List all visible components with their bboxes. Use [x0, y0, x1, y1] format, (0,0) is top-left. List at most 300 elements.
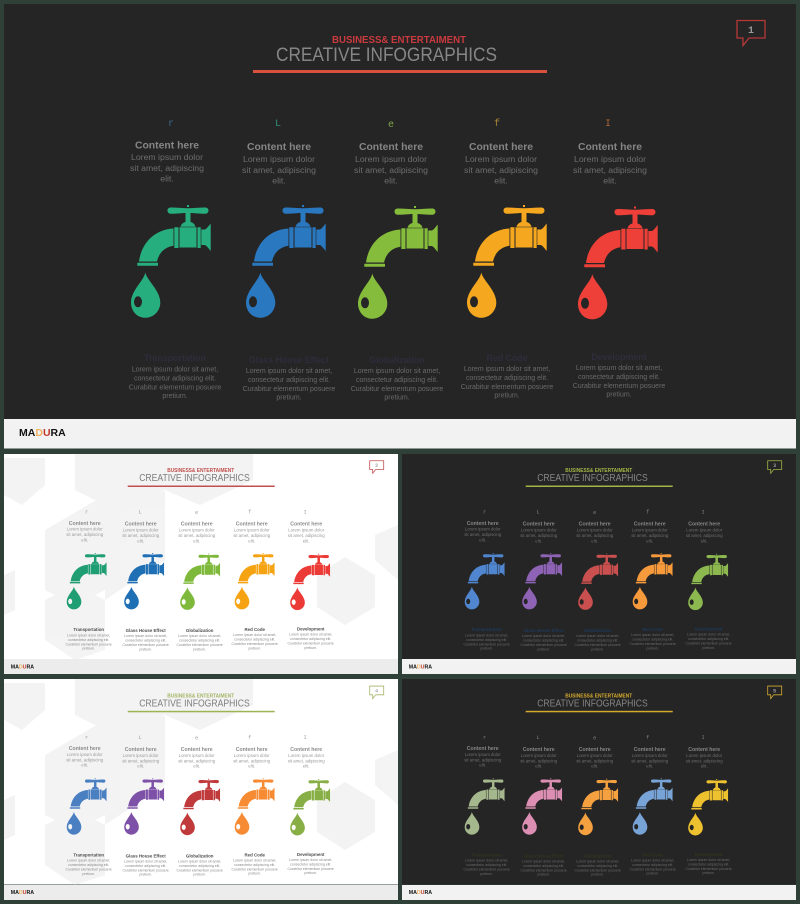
- slide 3 column 3: Lorem ipsum dolor sit amet,: [576, 634, 619, 638]
- slide 5 column 5: Lorem ipsum dolor sit amet,: [687, 858, 730, 862]
- slide 5 kicker: BUSINESS& ENTERTAIMENT: [565, 693, 633, 699]
- slide 4 column 1: r: [85, 735, 88, 741]
- slide 1 title: CREATIVE INFOGRAPHICS: [276, 44, 497, 66]
- slide 3 column 3: Lorem ipsum dolor: [577, 528, 613, 532]
- slide 2 title: CREATIVE INFOGRAPHICS: [139, 473, 250, 484]
- slide 4 kicker: BUSINESS& ENTERTAIMENT: [167, 693, 235, 699]
- slide 5 column 1: elit.: [479, 763, 486, 768]
- slide 2 column 4: Curabitur elementum posuere: [232, 642, 278, 646]
- slide 3 column 2: Glass House Effect: [524, 628, 564, 633]
- slide 5 column 1: Lorem ipsum dolor: [465, 752, 501, 757]
- slide 4 column 1: elit.: [81, 763, 88, 768]
- slide 5 column 2: Curabitur elementum posuere: [521, 868, 567, 872]
- slide 5 column 3: sit amet, adipiscing: [576, 758, 614, 763]
- slide 5 column 3: pretium.: [591, 873, 604, 877]
- slide 4 column 4: Curabitur elementum posuere: [232, 867, 278, 871]
- slide 1 column 2: sit amet, adipiscing: [242, 165, 316, 175]
- slide 1 page badge: 1: [748, 26, 754, 37]
- slide 2 column 4: [232, 510, 278, 650]
- slide 1 column 2: Curabitur elementum posuere: [243, 386, 335, 393]
- slide 2 column 5: [288, 510, 334, 650]
- slide 3 column 4: pretium.: [646, 646, 659, 650]
- slide 5 column 5: Lorem ipsum dolor: [686, 753, 723, 758]
- slide 3 column 2: Curabitur elementum posuere: [521, 643, 567, 647]
- slide 3 column 5: Development: [695, 626, 723, 632]
- slide 1 column 4: [461, 118, 553, 400]
- slide 3 column 2: pretium.: [537, 647, 550, 651]
- slide 2 column 1: Lorem ipsum dolor: [67, 526, 103, 532]
- slide 5 content: [409, 686, 782, 896]
- slide 5 page badge: 5: [773, 688, 776, 694]
- slide 4 column 2: [122, 735, 169, 877]
- slide 2 column 2: Content here: [125, 522, 157, 528]
- slide 5 column 3: e: [593, 735, 596, 741]
- slide 1 column 5: Content here: [578, 142, 642, 153]
- slide 2 column 5: Lorem ipsum dolor: [288, 528, 325, 532]
- slide 1 column 5: elit.: [603, 176, 617, 186]
- slide 2 column 2: Glass House Effect: [126, 628, 166, 633]
- slide 2 column 2: consectetur adipiscing elit.: [125, 638, 166, 642]
- slide 5 column 2: elit.: [535, 764, 542, 769]
- slide 1 column 4: elit.: [494, 176, 508, 186]
- slide 3 column 2: Lorem ipsum dolor sit amet,: [522, 634, 565, 638]
- slide 5 column 1: r: [483, 735, 486, 741]
- slide 4 content: [11, 686, 384, 896]
- slide 1 column 4: f: [494, 118, 500, 130]
- slide 4 column 1: Curabitur elementum posuere: [66, 868, 112, 872]
- slide 2 column 1: Curabitur elementum posuere: [66, 642, 112, 646]
- slide 3 column 1: r: [483, 510, 486, 516]
- slide 3 column 5: elit.: [701, 538, 708, 543]
- slide 1 column 5: pretium.: [606, 392, 632, 398]
- slide 4 page badge: [370, 686, 384, 699]
- slide 3 page badge: [768, 461, 782, 473]
- slide 1 column 3: consectetur adipiscing elit.: [356, 377, 438, 384]
- slide 4 column 2: Lorem ipsum dolor sit amet,: [124, 859, 167, 863]
- slide 4 column 5: elit.: [303, 764, 310, 769]
- slide 1 column 4: pretium.: [494, 392, 520, 400]
- slide 3 column 4: [630, 510, 676, 650]
- slide 5 column 3: Content here: [579, 747, 611, 753]
- slide 4 column 2: L: [139, 735, 142, 741]
- slide 3 column 3: Content here: [579, 522, 611, 528]
- slide 3 column 5: pretium.: [702, 646, 715, 650]
- slide 2 column 4: Content here: [236, 522, 268, 528]
- slide 1 column 3: e: [388, 120, 394, 131]
- slide 4 column 1: sit amet, adipiscing: [66, 757, 104, 762]
- slide 4 column 3: pretium.: [193, 873, 206, 877]
- slide 5 column 3: Curabitur elementum posuere: [575, 868, 621, 872]
- slide 1 column 5: [573, 119, 665, 398]
- slide 5 column 5: pretium.: [702, 871, 715, 875]
- slide 4 column 5: Lorem ipsum dolor sit amet,: [289, 858, 332, 862]
- slide 4 column 1: [66, 735, 112, 876]
- slide 5 column 2: consectetur adipiscing elit.: [523, 864, 564, 868]
- slide 5 column 5: Development: [695, 852, 723, 857]
- slide 5 title rule: [526, 711, 673, 712]
- slide 1 column 1: Lorem ipsum dolor sit amet,: [132, 366, 218, 374]
- slide 1 column 4: Lorem ipsum dolor: [465, 154, 537, 164]
- slide 2 column 1: pretium.: [82, 646, 95, 650]
- slide 5 column 3: elit.: [591, 764, 598, 769]
- slide 3 column 5: Lorem ipsum dolor: [686, 528, 723, 532]
- slide 5 column 4: f: [646, 735, 649, 741]
- slide 4 column 4: pretium.: [248, 872, 261, 876]
- slide 4 column 3: [177, 735, 223, 877]
- slide 4 column 4: Red Code: [244, 852, 265, 857]
- slide 4: small light: [4, 679, 398, 900]
- slide 4 column 1: consectetur adipiscing elit.: [68, 863, 109, 867]
- slide 4 column 5: pretium.: [304, 871, 317, 875]
- slide 1 column 1: consectetur adipiscing elit.: [134, 376, 216, 382]
- slide 5 column 4: elit.: [646, 764, 653, 769]
- slide 3: small dark: [402, 454, 796, 674]
- slide 5 column 3: consectetur adipiscing elit.: [577, 864, 618, 868]
- slide 4 column 5: [288, 735, 334, 875]
- slide 5 column 4: Lorem ipsum dolor: [632, 753, 668, 758]
- slide 1 logo: MADURA: [19, 427, 66, 439]
- slide 3 column 4: f: [646, 510, 649, 516]
- slide 5 column 2: pretium.: [537, 873, 550, 877]
- slide 2 kicker: BUSINESS& ENTERTAIMENT: [167, 468, 235, 474]
- slide 2 column 2: sit amet, adipiscing: [122, 533, 160, 538]
- slide 5 background: [402, 679, 796, 884]
- slide 3 background: [402, 454, 796, 659]
- slide 3 column 3: elit.: [591, 538, 598, 543]
- slide 1 column 1: elit.: [160, 174, 174, 184]
- slide 1 column 5: I: [605, 119, 611, 130]
- slide 3 logo: MADURA: [409, 664, 432, 670]
- slide 3 column 3: consectetur adipiscing elit.: [577, 638, 618, 642]
- slide 3 title rule: [526, 486, 673, 487]
- slide 5 column 3: Lorem ipsum dolor sit amet,: [576, 859, 619, 863]
- slide 2 column 2: Lorem ipsum dolor: [123, 528, 159, 532]
- slide 3 column 2: [520, 510, 567, 651]
- slide 4 column 3: e: [195, 735, 198, 741]
- slide 2 column 4: pretium.: [248, 646, 261, 650]
- slide 3 column 4: Curabitur elementum posuere: [630, 642, 676, 646]
- slide 3 column 3: pretium.: [591, 647, 604, 651]
- slide 1 column 3: Lorem ipsum dolor sit amet,: [354, 368, 440, 375]
- slide 5 column 3: [575, 735, 621, 877]
- slide 2: small light: [4, 454, 398, 674]
- slide 2 column 5: Development: [297, 626, 325, 632]
- slide 2 column 3: Lorem ipsum dolor: [179, 528, 215, 532]
- slide 2 column 1: elit.: [81, 537, 88, 542]
- slide 5 column 2: sit amet, adipiscing: [520, 758, 558, 763]
- slide 4 column 4: Lorem ipsum dolor sit amet,: [233, 858, 276, 862]
- slide 4 column 5: sit amet, adipiscing: [288, 758, 325, 763]
- slide 5 column 1: consectetur adipiscing elit.: [466, 863, 507, 867]
- slide 4 column 5: consectetur adipiscing elit.: [290, 862, 331, 866]
- slide 3 column 2: elit.: [535, 538, 542, 543]
- slide 3 column 3: Curabitur elementum posuere: [575, 643, 621, 647]
- slide 1 column 1: pretium.: [162, 393, 188, 400]
- slide 5 column 5: sit amet, adipiscing: [686, 758, 723, 763]
- slide 4 column 4: f: [248, 735, 251, 741]
- slide 3 column 2: consectetur adipiscing elit.: [523, 638, 564, 642]
- slide 3 column 1: elit.: [479, 537, 486, 542]
- slide 3 column 5: [686, 510, 732, 650]
- slide 5 logo: MADURA: [409, 890, 432, 896]
- slide 1 column 5: Lorem ipsum dolor sit amet,: [576, 365, 662, 372]
- slide 1 column 3: elit.: [384, 176, 398, 186]
- slide 3 column 4: consectetur adipiscing elit.: [632, 638, 673, 642]
- slide 5 column 4: sit amet, adipiscing: [631, 758, 669, 763]
- slide 3 column 5: I: [702, 510, 705, 516]
- slide 1 column 2: Glass House Effect: [249, 355, 329, 365]
- slide 5 column 2: Lorem ipsum dolor sit amet,: [522, 859, 565, 863]
- slide 2 column 3: Content here: [181, 522, 213, 528]
- slide 3 column 1: pretium.: [480, 646, 493, 650]
- slide 5 column 1: [464, 735, 510, 876]
- slide 3 column 1: [464, 510, 510, 650]
- slide 1 column 2: pretium.: [276, 394, 302, 402]
- slide 2 column 5: Curabitur elementum posuere: [288, 642, 334, 646]
- slide 1 column 1: Transportation: [144, 353, 206, 363]
- slide 5 column 2: Content here: [523, 747, 555, 753]
- slide 2 column 5: Content here: [290, 522, 322, 528]
- slide 4 column 2: Lorem ipsum dolor: [123, 753, 159, 758]
- slide 2 title rule: [128, 486, 275, 487]
- slide 2 column 5: sit amet, adipiscing: [288, 533, 325, 538]
- slide 2 column 5: Lorem ipsum dolor sit amet,: [289, 632, 332, 636]
- slide 3 column 1: Curabitur elementum posuere: [464, 642, 510, 646]
- slide 4 hexagon pattern: [4, 679, 398, 885]
- slide 1 column 3: sit amet, adipiscing: [354, 165, 428, 175]
- slide 2 column 5: I: [304, 510, 307, 516]
- slide 2 column 2: pretium.: [139, 647, 152, 651]
- slide 1 column 5: Curabitur elementum posuere: [573, 383, 665, 390]
- slide 4 column 3: Lorem ipsum dolor: [179, 753, 215, 758]
- slide 4 column 2: Content here: [125, 747, 157, 753]
- slide 2 column 3: [177, 510, 223, 651]
- slide 5 column 4: [630, 735, 676, 876]
- slide 2 footer bar: [4, 659, 398, 674]
- slide 4 footer bar: [4, 885, 398, 900]
- slide 3 column 2: Lorem ipsum dolor: [521, 528, 557, 532]
- slide 2 logo: MADURA: [11, 664, 34, 670]
- slide 5 column 2: Glass House Effect: [524, 853, 564, 858]
- slide 5 column 1: Content here: [467, 746, 499, 752]
- slide 5 title: CREATIVE INFOGRAPHICS: [537, 698, 648, 709]
- slide 2 content: [11, 461, 384, 670]
- slide 4 column 4: elit.: [248, 764, 255, 769]
- slide 5 column 4: Content here: [634, 747, 666, 753]
- slide 5 column 2: [520, 735, 567, 877]
- slide 3 column 5: Content here: [688, 522, 720, 528]
- slide 2 hexagon pattern: [4, 454, 398, 660]
- slide 1 column 3: Content here: [359, 142, 423, 153]
- slide 4 column 2: sit amet, adipiscing: [122, 758, 160, 763]
- slide 1 kicker: BUSINESS& ENTERTAIMENT: [332, 34, 467, 46]
- slide 2 column 3: elit.: [193, 538, 200, 543]
- slide 3 page badge: 3: [773, 463, 776, 469]
- slide 4 column 2: consectetur adipiscing elit.: [125, 864, 166, 868]
- slide 4 column 3: sit amet, adipiscing: [178, 758, 216, 763]
- slide 3 column 3: Globalization: [584, 628, 612, 633]
- slide 4 column 4: [232, 735, 278, 876]
- slide 2 column 1: sit amet, adipiscing: [66, 532, 104, 537]
- slide 1 column 5: consectetur adipiscing elit.: [578, 374, 660, 381]
- slide 1 column 1: Lorem ipsum dolor: [131, 152, 203, 162]
- slide 5 column 4: Lorem ipsum dolor sit amet,: [631, 858, 674, 862]
- slide 3 column 3: sit amet, adipiscing: [576, 533, 614, 538]
- slide 1 column 3: pretium.: [384, 394, 410, 402]
- slide 2 column 2: Curabitur elementum posuere: [123, 643, 169, 647]
- slide 3 column 2: sit amet, adipiscing: [520, 533, 558, 538]
- slide 3 column 3: e: [593, 510, 596, 516]
- slide 3 column 2: Content here: [523, 522, 555, 528]
- slide 4 column 3: Lorem ipsum dolor sit amet,: [178, 859, 221, 863]
- slide 2 column 1: Transportation: [73, 627, 104, 632]
- slide 2 column 5: pretium.: [304, 646, 317, 650]
- slide 1 column 2: Lorem ipsum dolor: [243, 154, 315, 164]
- slide 5 column 5: elit.: [701, 764, 708, 769]
- slide 5 column 2: Lorem ipsum dolor: [521, 753, 557, 758]
- slide 2 column 4: f: [248, 510, 251, 516]
- slide 5 column 3: Lorem ipsum dolor: [577, 753, 613, 758]
- slide 5 column 5: Curabitur elementum posuere: [686, 867, 732, 871]
- slide 1 title rule: [253, 70, 547, 73]
- slide 4 title: CREATIVE INFOGRAPHICS: [139, 698, 250, 709]
- slide 3 content: [409, 461, 782, 670]
- slide 1 column 3: [351, 120, 443, 402]
- slide 3 column 1: Content here: [467, 521, 499, 527]
- slide 2 column 4: consectetur adipiscing elit.: [234, 638, 275, 642]
- slide 1: large dark: [4, 4, 796, 448]
- slide 5 footer bar: [402, 885, 796, 900]
- slide 4 column 2: elit.: [137, 764, 144, 769]
- slide 1 column 2: elit.: [272, 176, 286, 186]
- slide 1 column 4: Lorem ipsum dolor sit amet,: [464, 366, 550, 373]
- slide 5 column 4: pretium.: [646, 872, 659, 876]
- slide 5 column 4: Curabitur elementum posuere: [630, 867, 676, 871]
- slide 4 title rule: [128, 711, 275, 712]
- slide 3 footer bar: [402, 659, 796, 674]
- slide 2 column 3: Lorem ipsum dolor sit amet,: [178, 634, 221, 638]
- slide 1 column 4: Content here: [469, 142, 533, 153]
- slide 3 column 4: sit amet, adipiscing: [631, 533, 669, 538]
- slide 3 column 1: Lorem ipsum dolor sit amet,: [465, 633, 508, 637]
- slide 4 page badge: 4: [375, 688, 378, 694]
- slide 2 column 4: Red Code: [244, 627, 265, 632]
- slide 3 kicker: BUSINESS& ENTERTAIMENT: [565, 468, 633, 474]
- slide 3 column 3: [575, 510, 621, 651]
- slide 4 column 1: pretium.: [82, 872, 95, 876]
- slide 3 column 4: Lorem ipsum dolor sit amet,: [631, 633, 674, 637]
- slide 4 column 5: Curabitur elementum posuere: [288, 867, 334, 871]
- slide 3 column 1: consectetur adipiscing elit.: [466, 638, 507, 642]
- slide 2 background: [4, 454, 398, 659]
- slide 3 column 1: sit amet, adipiscing: [464, 532, 502, 537]
- slide 1 column 4: sit amet, adipiscing: [464, 165, 538, 175]
- slide 1 column 4: Curabitur elementum posuere: [461, 384, 553, 391]
- slide 2 column 1: consectetur adipiscing elit.: [68, 638, 109, 642]
- slide 3 column 5: Curabitur elementum posuere: [686, 642, 732, 646]
- slide 2 column 1: Content here: [69, 521, 101, 527]
- slide 5 column 5: [686, 735, 732, 875]
- slide 3 column 4: Lorem ipsum dolor: [632, 528, 668, 532]
- slide 5 column 5: I: [702, 735, 705, 741]
- slide 1 content: [19, 20, 765, 439]
- slide 4 column 4: Content here: [236, 747, 268, 753]
- slide 4 column 5: Lorem ipsum dolor: [288, 753, 325, 758]
- slide 4 column 2: Curabitur elementum posuere: [123, 868, 169, 872]
- slide 1 column 4: Red Code: [486, 353, 528, 363]
- slide 2 page badge: [370, 461, 384, 473]
- slide 4 column 4: consectetur adipiscing elit.: [234, 863, 275, 867]
- slide 2 column 3: sit amet, adipiscing: [178, 533, 216, 538]
- slide 4 column 5: I: [304, 735, 307, 741]
- slide 2 column 3: Globalization: [186, 628, 214, 633]
- slide 1 column 1: Content here: [135, 140, 199, 152]
- slide 5 column 1: pretium.: [480, 872, 493, 876]
- slide 5 column 1: Curabitur elementum posuere: [464, 868, 510, 872]
- slide 2 column 1: [66, 510, 112, 650]
- slide 3 column 4: elit.: [646, 538, 653, 543]
- slide 4 column 2: pretium.: [139, 873, 152, 877]
- slide 5 page badge: [768, 686, 782, 699]
- slide 1 footer bar: [4, 419, 796, 448]
- slide 4 column 5: Content here: [290, 747, 322, 753]
- slide 2 column 1: r: [85, 510, 88, 516]
- slide 1 column 4: consectetur adipiscing elit.: [466, 375, 548, 382]
- slide 4 logo: MADURA: [11, 890, 34, 896]
- slide 4 column 3: elit.: [193, 764, 200, 769]
- slide 2 column 5: consectetur adipiscing elit.: [290, 637, 331, 641]
- slide 1 page badge: [737, 20, 765, 46]
- slide 1 column 1: sit amet, adipiscing: [130, 163, 204, 173]
- slide 1 column 5: Lorem ipsum dolor: [574, 154, 646, 164]
- slide 2 column 4: Lorem ipsum dolor sit amet,: [233, 633, 276, 637]
- slide 2 column 2: L: [139, 510, 142, 516]
- slide 1 column 2: consectetur adipiscing elit.: [248, 377, 330, 384]
- slide 2 column 2: elit.: [137, 538, 144, 543]
- slide 5 column 4: consectetur adipiscing elit.: [632, 863, 673, 867]
- slide 4 column 1: Content here: [69, 746, 101, 752]
- slide 2 column 4: elit.: [248, 538, 255, 543]
- slide 2 column 3: pretium.: [193, 647, 206, 651]
- slide 4 column 1: Transportation: [73, 852, 104, 857]
- slide 1 column 3: Globalization: [369, 355, 425, 365]
- slide 4 column 4: sit amet, adipiscing: [233, 758, 271, 763]
- slide 3 column 1: Lorem ipsum dolor: [465, 526, 501, 532]
- slide 5 column 1: sit amet, adipiscing: [464, 757, 502, 762]
- slide 2 column 5: elit.: [303, 538, 310, 543]
- slide 1 column 3: Lorem ipsum dolor: [355, 154, 427, 164]
- slide 2 column 3: consectetur adipiscing elit.: [179, 638, 220, 642]
- slide 1 column 3: Curabitur elementum posuere: [351, 386, 443, 393]
- slide 5 column 1: Transportation: [471, 852, 502, 857]
- slide 3 column 1: Transportation: [471, 627, 502, 632]
- slide 3 column 4: Red Code: [642, 627, 663, 632]
- slide 1 column 2: [242, 119, 335, 402]
- slide 3 column 4: Content here: [634, 522, 666, 528]
- slide 2 column 3: e: [195, 510, 198, 516]
- slide 2 column 4: sit amet, adipiscing: [233, 533, 271, 538]
- slide 3 column 5: Lorem ipsum dolor sit amet,: [687, 632, 730, 636]
- slide 4 column 1: Lorem ipsum dolor sit amet,: [67, 859, 110, 863]
- slide 1 column 2: L: [275, 119, 281, 130]
- slide 3 column 2: L: [537, 510, 540, 516]
- slide 1 column 2: Content here: [247, 142, 311, 153]
- slide 3 column 5: sit amet, adipiscing: [686, 533, 723, 538]
- slide 5: small dark: [402, 679, 796, 900]
- slide 2 column 2: [122, 510, 169, 651]
- slide 5 column 5: consectetur adipiscing elit.: [688, 862, 729, 866]
- slide 3 title: CREATIVE INFOGRAPHICS: [537, 473, 648, 484]
